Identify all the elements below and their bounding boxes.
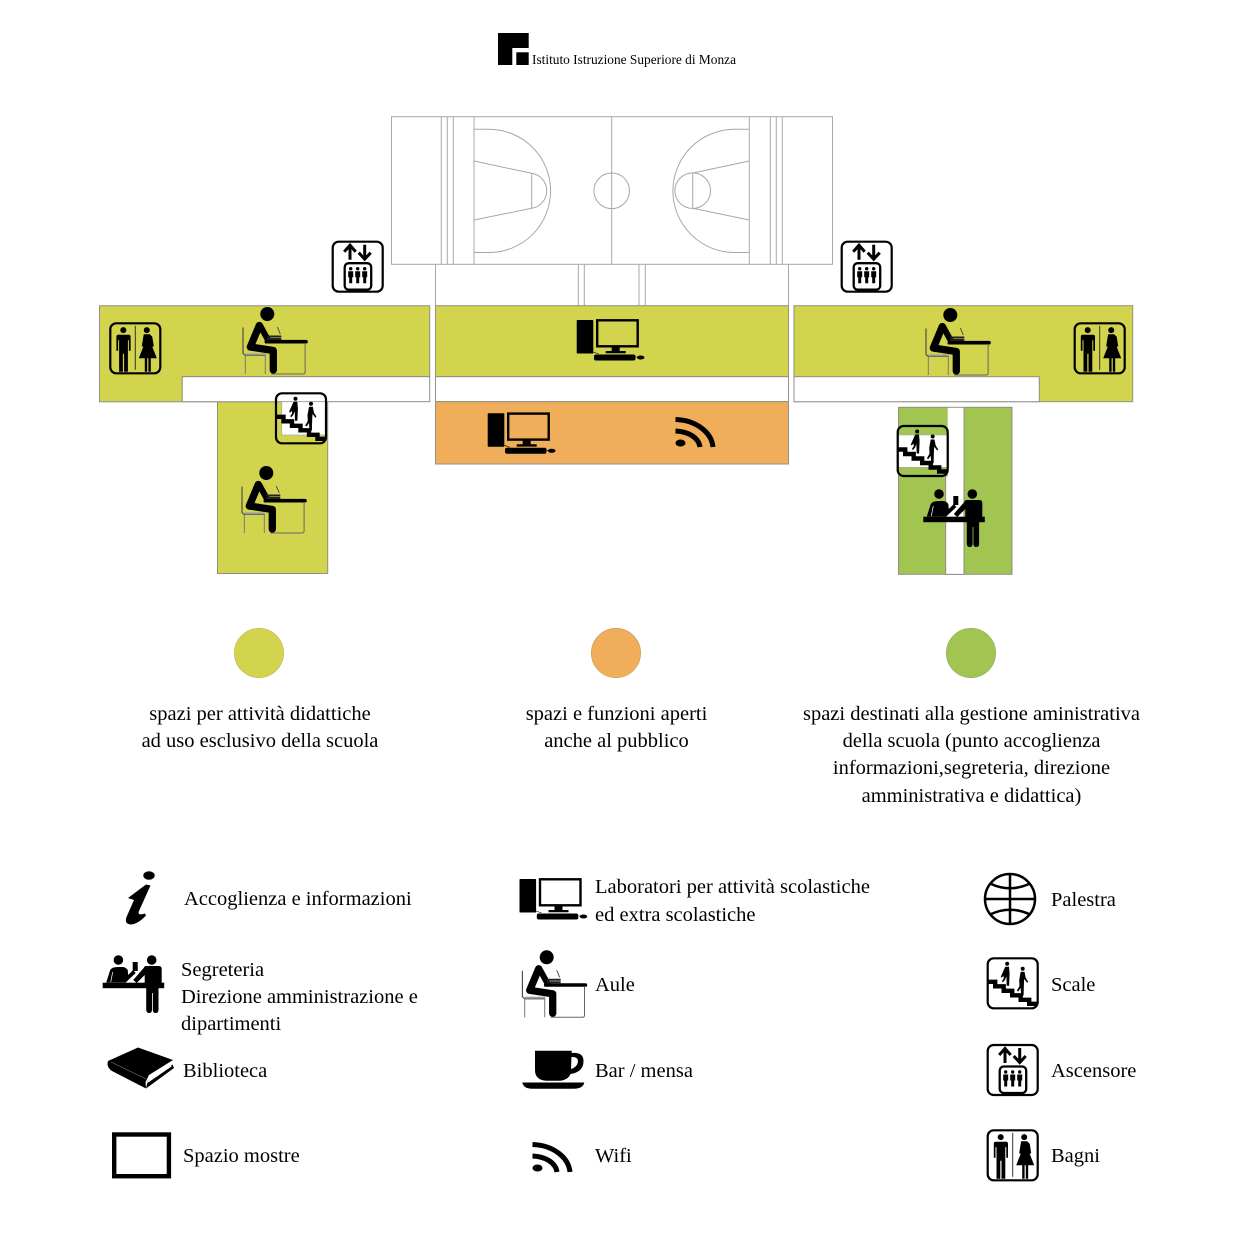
icon: stairwell opening left <box>282 402 327 435</box>
plan: right wing (didactic spaces) <box>794 306 1133 402</box>
icon: book <box>108 1048 174 1088</box>
legend item: classrooms <box>522 950 635 1017</box>
icon: lift right <box>842 242 892 292</box>
legend item: secretary: Segreteria <box>181 959 264 981</box>
legend item: lift <box>988 1045 1136 1095</box>
logo: Istituto Istruzione Superiore di Monza: Istituto Istruzione Superiore di Monza <box>532 52 736 67</box>
legend item: reception: Accoglienza e informazioni <box>184 888 412 910</box>
icon: front desk <box>103 955 164 1013</box>
icon: stairs left <box>276 393 326 443</box>
legend item: toilets <box>988 1130 1100 1180</box>
legend item: bar: Bar / mensa <box>595 1060 693 1082</box>
icon: student at desk <box>522 950 585 1017</box>
icon: lift left <box>333 242 383 292</box>
legend item: gym <box>985 874 1116 924</box>
text: didactic spaces description <box>142 703 378 752</box>
icon: toilets right <box>1075 323 1125 373</box>
icon: toilets <box>988 1130 1038 1180</box>
icon: lab public <box>488 413 556 454</box>
icon: stairwell opening right <box>899 435 949 467</box>
text: administration spaces description <box>803 703 1140 807</box>
logo: Istituto Istruzione Superiore di Monza <box>498 33 736 67</box>
plan: left wing (didactic spaces) <box>100 306 430 574</box>
icon: computer <box>520 879 587 920</box>
text: administration spaces description: della scuola (punto accoglienza <box>843 730 1100 752</box>
icon: secretary office <box>923 489 985 547</box>
plan: basketball court <box>392 117 832 264</box>
text: public spaces description: spazi e funzioni aperti <box>526 703 708 725</box>
icon: coffee cup <box>522 1051 584 1089</box>
icon: picture frame <box>114 1134 169 1176</box>
text: administration spaces description: amministrativa e didattica) <box>862 785 1081 807</box>
legend circle: public spaces <box>591 628 641 678</box>
text: public spaces description: anche al pubblico <box>544 730 689 752</box>
icon: classroom right wing <box>926 308 989 375</box>
legend item: laboratories: ed extra scolastiche <box>595 904 756 926</box>
legend item: gym: Palestra <box>1051 889 1116 911</box>
icon: lab central <box>577 320 644 360</box>
legend item: library <box>108 1048 267 1088</box>
icon: classroom left wing <box>243 307 306 374</box>
legend item: secretary: dipartimenti <box>181 1013 282 1035</box>
legend circle: didactic spaces <box>234 628 284 678</box>
legend item: stairs <box>988 958 1095 1008</box>
text: administration spaces description: spazi destinati alla gestione aministrativa <box>803 703 1140 725</box>
text: didactic spaces description: spazi per attività didattiche <box>149 703 371 725</box>
plan: connector lines between court and building <box>436 264 788 306</box>
legend item: laboratories <box>520 876 870 926</box>
legend item: toilets: Bagni <box>1051 1145 1100 1167</box>
icon: toilets left <box>110 323 160 373</box>
legend item: library: Biblioteca <box>183 1060 267 1082</box>
legend item: classrooms: Aule <box>595 974 635 996</box>
legend circle: administration spaces <box>946 628 996 678</box>
icon: basketball <box>985 874 1035 924</box>
legend item: wifi: Wifi <box>595 1145 632 1167</box>
legend item: bar <box>522 1051 693 1089</box>
icon: lift <box>988 1045 1038 1095</box>
plan: administration block <box>898 407 1012 574</box>
plan: central block (labs) <box>436 306 788 464</box>
legend item: stairs: Scale <box>1051 974 1095 996</box>
icon: stairs <box>988 958 1038 1008</box>
legend item: secretary: Direzione amministrazione e <box>181 986 418 1008</box>
icon: classroom lower left <box>242 466 305 533</box>
text: administration spaces description: informazioni,segreteria, direzione <box>833 757 1110 779</box>
legend item: exhibition space <box>114 1134 300 1176</box>
icon: wifi public <box>676 420 713 447</box>
icon: wifi signal <box>532 1144 570 1172</box>
legend item: wifi <box>532 1144 632 1172</box>
legend item: laboratories: Laboratori per attività scolastiche <box>595 876 870 898</box>
legend item: lift: Ascensore <box>1051 1060 1136 1082</box>
text: didactic spaces description: ad uso esclusivo della scuola <box>142 730 378 752</box>
text: public spaces description <box>526 703 708 752</box>
legend item: reception <box>126 871 412 924</box>
icon: stairs right <box>898 426 948 476</box>
icon: information <box>126 871 155 924</box>
legend item: secretary <box>103 955 418 1035</box>
legend item: exhibition space: Spazio mostre <box>183 1145 300 1167</box>
